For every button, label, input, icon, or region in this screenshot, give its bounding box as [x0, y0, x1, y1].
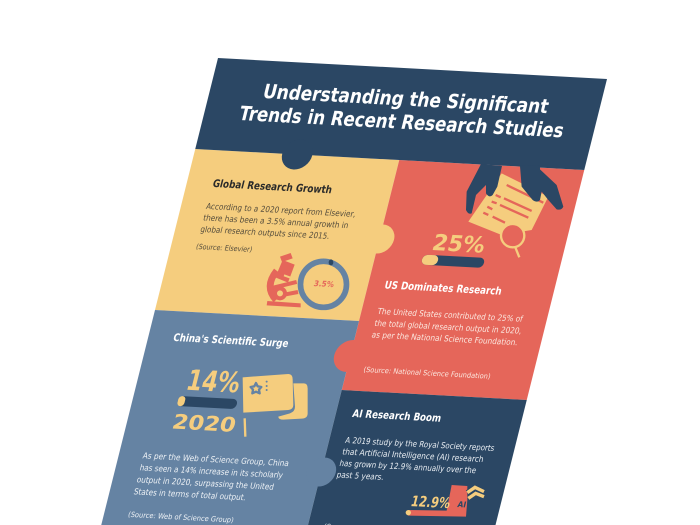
stat: 14 percent: 14%	[183, 364, 244, 399]
panel: ai research boom	[294, 389, 527, 525]
text: growth body: global research outputs since 2015.	[199, 224, 331, 241]
progress bar: 14 percent	[177, 396, 238, 409]
text: growth body: there has been a 3.5% annual growth in	[202, 212, 350, 230]
text: china source: (Source: Web of Science Group)	[127, 510, 235, 524]
heading: global research growth: Global Research Growth	[211, 177, 334, 196]
heading: ai research boom: AI Research Boom	[351, 407, 443, 425]
panel: us dominates research	[327, 159, 584, 400]
panel: global research growth	[155, 149, 414, 322]
text: us body	[370, 306, 526, 347]
text: china body: has seen a 14% increase in its scholarly	[139, 462, 284, 480]
text: us body: The United States contributed to 25% of	[376, 306, 525, 324]
text: growth body: According to a 2020 report from Elsevier,	[205, 201, 357, 219]
panel: header	[192, 58, 607, 185]
stat: 12.9 percent: 12.9%	[409, 493, 452, 512]
text: growth source: (Source: Elsevier)	[195, 242, 253, 254]
heading: us dominates research: US Dominates Research	[383, 279, 503, 298]
panel: china's scientific surge	[101, 310, 375, 525]
text: ai body: A 2019 study by the Royal Society reports	[344, 435, 496, 453]
label: donut value: 3.5%	[313, 279, 335, 289]
text: us source: (Source: National Science Foundation)	[363, 365, 492, 381]
title: Understanding the Significant	[261, 80, 552, 118]
text: ai body: past 5 years.	[336, 470, 385, 482]
text: us body: the total global research output in 2020,	[374, 318, 523, 336]
icon: document and magnifier	[468, 173, 548, 257]
poster card	[101, 58, 607, 525]
text: us body: as per the National Science Foundation.	[371, 330, 519, 347]
progress bar: 25 percent	[421, 255, 485, 268]
text: ai body: that Artificial Intelligence (AI) research	[341, 447, 485, 464]
icon: ai growth arrow	[406, 485, 484, 517]
icon: donut chart	[300, 259, 346, 307]
text: china body: States in terms of total output.	[133, 486, 247, 502]
heading: china's scientific surge: China's Scientific Surge	[172, 331, 290, 350]
icon: hands	[466, 164, 563, 214]
text: china body: As per the Web of Science Group, China	[142, 450, 290, 468]
text: china body	[133, 450, 290, 504]
label: ai: AI	[457, 499, 467, 509]
text: ai body	[336, 435, 496, 487]
text: china body: output in 2020, surpassing the United	[136, 474, 275, 492]
text: growth body	[199, 201, 357, 242]
text: ai body: has grown by 12.9% annually over the	[339, 458, 477, 475]
title: Trends in Recent Research Studies	[237, 102, 566, 142]
title	[237, 79, 572, 142]
stat: 25 percent: 25%	[430, 230, 488, 259]
icon: microscope	[267, 253, 301, 307]
stat: year 2020: 2020	[170, 410, 239, 437]
icon: china flag	[243, 374, 308, 437]
